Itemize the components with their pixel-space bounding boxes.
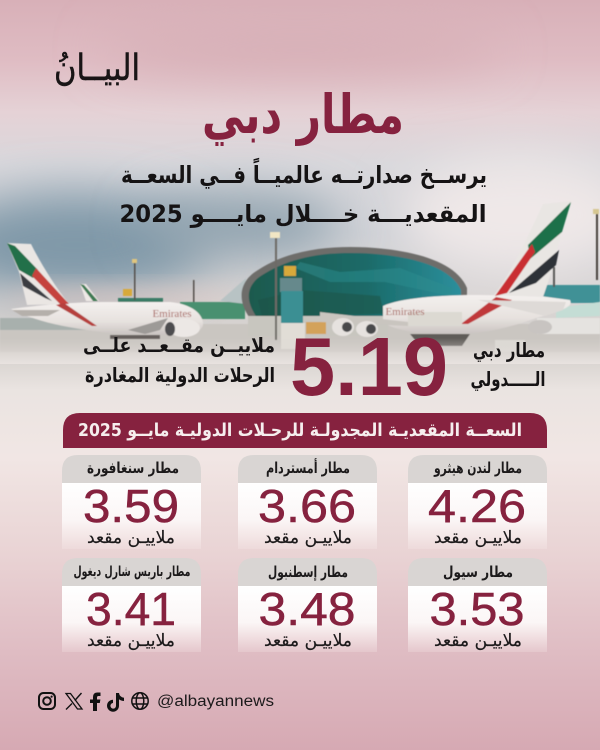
right side concourse <box>537 209 600 334</box>
stat label right: مطار دبي <box>473 338 545 363</box>
engine <box>168 319 200 337</box>
card: Singapore: ملاييـن مقعد <box>87 528 175 548</box>
handle: @albayannews <box>157 693 274 710</box>
card: Heathrow: مطار لندن هيثرو <box>433 459 522 477</box>
tail green <box>528 202 571 259</box>
photo fade <box>0 338 600 364</box>
tail fin <box>7 243 69 305</box>
gate tower <box>280 266 305 349</box>
icon: facebook <box>90 692 100 711</box>
icon: instagram <box>39 693 55 709</box>
distant tail <box>80 284 99 301</box>
stat label left: ملاييــن مقــعــد علــى <box>83 333 275 357</box>
livery: Emirates <box>385 306 425 318</box>
card: Paris: مطار باريس شارل ديغول <box>74 564 190 580</box>
card: Istanbul: مطار إسطنبول <box>268 563 348 581</box>
left Emirates A380 <box>7 243 203 339</box>
icon: X <box>66 693 82 710</box>
card: Singapore: 3.59 <box>83 480 179 532</box>
icon: tiktok <box>107 693 124 712</box>
card: Seoul: مطار سيول <box>443 563 513 581</box>
rear red sweep <box>461 297 512 324</box>
light masts <box>123 232 280 340</box>
card: Seoul: 3.53 <box>430 583 524 635</box>
lower terminal podium <box>248 316 388 336</box>
apron ground <box>0 324 600 352</box>
card: Paris <box>62 558 201 652</box>
stat label right <box>470 338 546 392</box>
stat label left <box>83 333 275 387</box>
stat value: 5.19 <box>290 320 448 413</box>
fuselage <box>11 302 203 335</box>
card: Seoul <box>408 558 547 652</box>
headline stat <box>83 320 546 413</box>
section banner: السعــة المقعديـة المجدولـة للرحـلات الدوليـة مايــو 2025 <box>78 420 522 441</box>
gate bridge <box>408 312 462 326</box>
card: Heathrow: ملاييـن مقعد <box>434 528 522 548</box>
subtitle line 1: يرســخ صدارتــه عالميــاً فــي السعــة <box>121 158 487 189</box>
card: Amsterdam: ملاييـن مقعد <box>264 528 352 548</box>
water and far strip <box>0 318 120 330</box>
tail black <box>509 250 559 293</box>
engines <box>332 318 354 336</box>
sky clouds <box>0 28 600 306</box>
card: Istanbul: ملاييـن مقعد <box>264 631 352 651</box>
stat label right: الـــــدولي <box>470 367 546 392</box>
card: Seoul: ملاييـن مقعد <box>434 631 522 651</box>
tail red <box>32 268 69 304</box>
section banner <box>63 413 547 448</box>
card: Paris: 3.41 <box>86 583 176 635</box>
subtitle line 2: المقعديـــة خــــلال مايــــو 2025 <box>120 200 486 228</box>
tail fin <box>494 201 571 297</box>
card: Heathrow: 4.26 <box>428 480 526 532</box>
terminal dome <box>242 247 467 322</box>
tail black <box>20 273 52 301</box>
livery: Emirates <box>152 308 192 320</box>
wing <box>128 318 168 334</box>
tailplane <box>478 300 566 316</box>
card: Amsterdam: مطار أمستردام <box>266 458 350 477</box>
left glass walkway <box>118 278 246 319</box>
social footer <box>39 692 274 712</box>
stairs and truck <box>410 334 470 346</box>
title: مطار دبي <box>202 83 404 146</box>
card: Amsterdam: 3.66 <box>258 480 356 532</box>
logo: البيــانُ <box>54 48 140 89</box>
tailplane <box>12 310 60 316</box>
card: Singapore <box>62 455 201 549</box>
card: Paris: ملاييـن مقعد <box>87 631 175 651</box>
fuselage <box>383 295 571 334</box>
stat label left: الرحلات الدولية المغادرة <box>85 363 275 387</box>
card: Amsterdam <box>238 455 377 549</box>
right Emirates A380 <box>320 201 571 352</box>
tail green <box>7 243 38 278</box>
tail red <box>495 244 535 296</box>
rear red sweep <box>56 303 97 326</box>
airport photo <box>0 201 600 352</box>
card: Istanbul: 3.48 <box>258 583 356 635</box>
card: Heathrow <box>408 455 547 549</box>
icon: globe <box>132 693 148 709</box>
card: Istanbul <box>238 558 377 652</box>
card: Singapore: مطار سنغافورة <box>87 459 179 477</box>
